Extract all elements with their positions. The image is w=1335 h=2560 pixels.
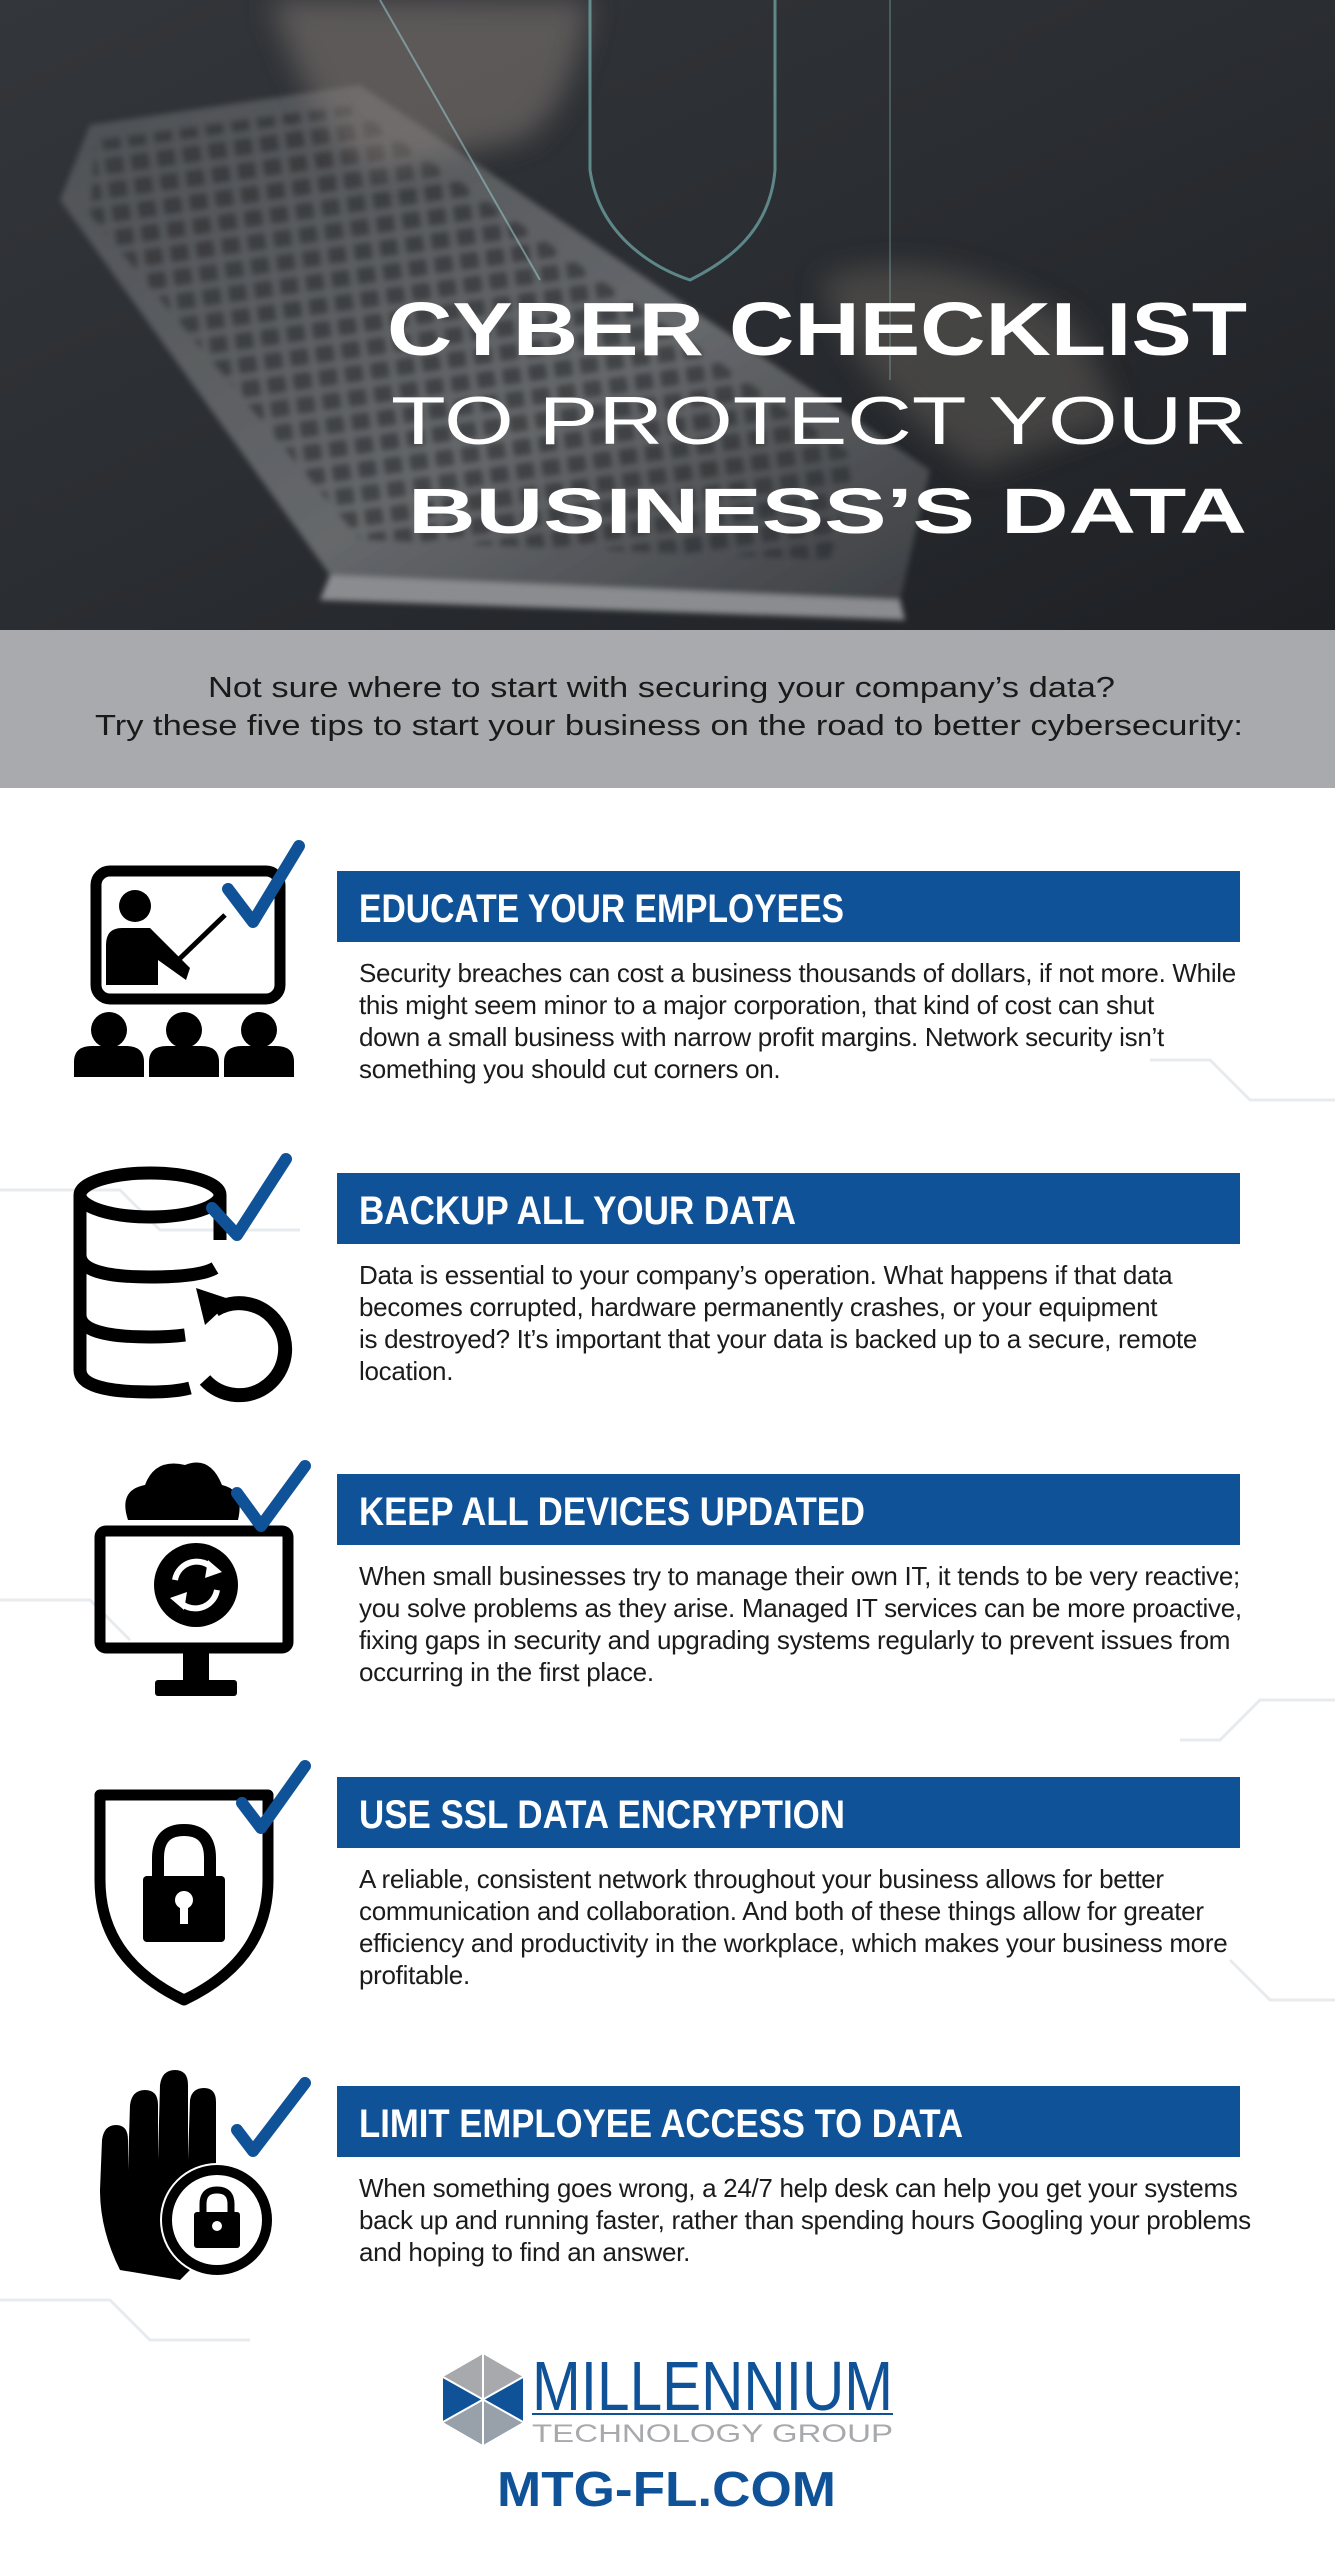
body text: something you should cut corners on. — [359, 1054, 780, 1084]
body text: Security breaches can cost a business thousands of dollars, if not more. While — [359, 958, 1236, 988]
icon: monitor — [100, 1462, 305, 1696]
body text: A reliable, consistent network throughout your business allows for better — [359, 1864, 1164, 1894]
body text: Data is essential to your company’s operation. What happens if that data — [359, 1260, 1173, 1290]
body text: and hoping to find an answer. — [359, 2237, 690, 2267]
heading bar — [337, 871, 1240, 942]
logo: MILLENNIUM — [532, 2347, 893, 2425]
body text: communication and collaboration. And both of these things allow for greater — [359, 1896, 1204, 1926]
section 5: limit access — [100, 2070, 1251, 2280]
body text: you solve problems as they arise. Managed IT services can be more proactive, — [359, 1593, 1242, 1623]
heading bar — [337, 1173, 1240, 1244]
heading bar: LIMIT EMPLOYEE ACCESS TO DATA — [359, 2102, 963, 2146]
title: CYBER CHECKLIST — [387, 287, 1247, 371]
body text: When something goes wrong, a 24/7 help desk can help you get your systems — [359, 2173, 1238, 2203]
logo: TECHNOLOGY GROUP — [532, 2420, 893, 2448]
icon: presenter — [74, 846, 299, 1077]
title: TO PROTECT YOUR — [391, 383, 1247, 459]
logo — [443, 2347, 893, 2448]
heading bar: EDUCATE YOUR EMPLOYEES — [359, 887, 844, 931]
icon: cube — [443, 2354, 523, 2445]
section 3: devices — [100, 1462, 1242, 1696]
body text: profitable. — [359, 1960, 470, 1990]
section 1: educate — [74, 846, 1240, 1084]
faint circuit background — [0, 1060, 1335, 2340]
icon: shield lock — [100, 1766, 305, 2000]
intro band: Try these five tips to start your business on the road to better cybersecurity: — [95, 710, 1243, 742]
heading bar — [337, 2086, 1240, 2157]
body text: fixing gaps in security and upgrading systems regularly to prevent issues from — [359, 1625, 1230, 1655]
section 4: ssl — [100, 1766, 1240, 2000]
body text: back up and running faster, rather than spending hours Googling your problems — [359, 2205, 1251, 2235]
body text: location. — [359, 1356, 453, 1386]
body text: efficiency and productivity in the workplace, which makes your business more — [359, 1928, 1227, 1958]
body text: occurring in the first place. — [359, 1657, 654, 1687]
body text: becomes corrupted, hardware permanently crashes, or your equipment — [359, 1292, 1158, 1322]
heading bar: BACKUP ALL YOUR DATA — [359, 1189, 796, 1233]
heading bar: KEEP ALL DEVICES UPDATED — [359, 1490, 865, 1534]
icon: hand lock — [100, 2070, 305, 2280]
intro band: Not sure where to start with securing your company’s data? — [208, 672, 1115, 704]
heading bar — [337, 1474, 1240, 1545]
body text: is destroyed? It’s important that your data is backed up to a secure, remote — [359, 1324, 1197, 1354]
title — [387, 287, 1247, 547]
icon: database — [80, 1159, 286, 1395]
body text: When small businesses try to manage their own IT, it tends to be very reactive; — [359, 1561, 1240, 1591]
website url: MTG-FL.COM — [497, 2463, 836, 2517]
heading bar: USE SSL DATA ENCRYPTION — [359, 1793, 845, 1837]
heading bar — [337, 1777, 1240, 1848]
body text: this might seem minor to a major corporation, that kind of cost can shut — [359, 990, 1155, 1020]
intro band — [0, 630, 1335, 788]
section 2: backup — [80, 1159, 1240, 1395]
title: BUSINESS’S DATA — [408, 475, 1247, 547]
header photo — [0, 0, 1335, 630]
body text: down a small business with narrow profit margins. Network security isn’t — [359, 1022, 1165, 1052]
